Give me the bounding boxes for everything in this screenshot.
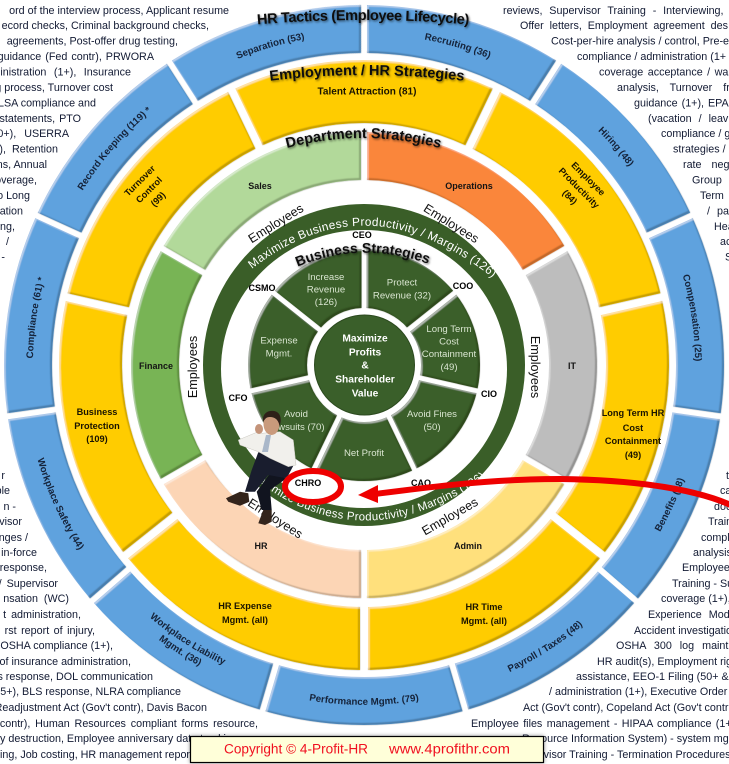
segment: employee productivity [456, 74, 683, 329]
segment: IT [526, 251, 597, 479]
segment: payroll and taxes [443, 564, 642, 721]
text block: top left tactics list: ecord checks, Criminal background checks, [2, 20, 209, 32]
label: compliance: Compliance (61) * [26, 276, 44, 358]
segment: record keeping [27, 55, 202, 243]
text block: top left tactics list: / [6, 236, 9, 248]
segment: increase revenue [270, 240, 385, 339]
segment: avoid lawsuits [243, 360, 353, 475]
trouser leg front [245, 452, 293, 492]
shoe left [226, 492, 249, 506]
center hub: maximize profits and shareholder value: & [361, 360, 369, 372]
wheel: business strategies segments [240, 240, 488, 481]
text block: top right tactics list: strategies / [673, 144, 726, 156]
segment: hiring [526, 55, 701, 243]
callout: CHRO red ellipse [285, 471, 341, 502]
text block: top left tactics list: LSA compliance and [0, 98, 96, 110]
segment: net profit [316, 417, 412, 481]
segment: compensation [647, 216, 729, 420]
label: business protection: Protection [74, 421, 120, 431]
text block: top left tactics list: inistration (1+), Insurance [0, 66, 131, 78]
ring: department strategies segments [131, 106, 597, 624]
heading: maximize productivity top band text: Maximize Business Productivity / Margins (126) [248, 218, 496, 278]
text block: top right tactics list: Group [692, 174, 722, 186]
segment: avoid fines [375, 360, 485, 475]
text block: top left tactics list: ord of the interview process, Applicant resume [9, 5, 229, 17]
label: employees top right: Employees [421, 201, 481, 246]
label: expense management: Expense [260, 336, 298, 346]
labels: department segments [139, 181, 577, 551]
label: CAO: CAO [411, 478, 431, 488]
hand [255, 424, 263, 434]
label: separation: Separation (53) [236, 32, 304, 58]
text block: top right tactics list: Term [700, 190, 724, 202]
text block: bottom right tactics list: OSHA 300 log maint [616, 640, 728, 652]
label: expense management: Mgmt. [266, 348, 292, 360]
text block: top right tactics list: rate neg [683, 159, 729, 171]
text block: bottom left tactics list: in-force [1, 547, 37, 559]
label: avoid fines: (50) [423, 422, 441, 433]
label: long term cost containment: Long Term [426, 324, 472, 335]
text block: bottom left tactics list: t administration, [3, 609, 81, 621]
label: employee productivity: (84) [560, 188, 579, 207]
labels: employees around the band [186, 201, 542, 541]
text block: top right tactics list [503, 5, 729, 264]
text block: bottom right tactics list: Act (Gov't contr), Copeland Act (Gov't contr [523, 702, 729, 714]
neck and face [264, 413, 280, 435]
label: workplace safety: Workplace Safety (44) [38, 457, 84, 550]
shoe right [258, 510, 272, 525]
text block: bottom left tactics list: r [1, 470, 5, 482]
label: long term cost containment: Containment [422, 349, 477, 360]
segment: long term cost containment [404, 292, 488, 400]
label: CFO: CFO [228, 393, 248, 403]
label: employees top left: Employees [246, 201, 306, 246]
label: long term HR cost containment: Long Term HR [602, 408, 665, 418]
label: HR: HR [254, 541, 268, 551]
text block: top right tactics list: reviews, Supervisor Training - Interviewing, [503, 5, 724, 17]
label: IT: IT [568, 361, 577, 371]
label: COO: COO [453, 281, 473, 291]
label: business protection: Business [77, 407, 117, 417]
labels: business strategy segments [260, 272, 477, 459]
text block: bottom right tactics list: Supervisor Training - Termination Procedures [515, 749, 729, 761]
segment: HR expense management [116, 507, 385, 696]
label: avoid lawsuits: Avoid [284, 409, 308, 420]
center hub: maximize profits and shareholder value: Profits [349, 348, 381, 358]
segment: separation [168, 0, 374, 105]
label: benefits: Benefits (48) [654, 478, 686, 532]
text block: bottom right tactics list: Experience Mod [648, 609, 729, 621]
segment: admin [346, 448, 579, 624]
label: avoid lawsuits: Lawsuits (70) [267, 422, 325, 433]
segment: HR [149, 448, 382, 624]
text block: top left tactics list: ation [0, 206, 23, 218]
segment: HR time management [343, 507, 612, 696]
text block: top right tactics list: compliance / administration (1+ [577, 51, 726, 63]
text block: bottom right tactics list: Employee [682, 562, 729, 574]
label: net profit: Net Profit [344, 448, 384, 459]
label: employee productivity: Employee [569, 160, 607, 198]
text block: bottom left tactics list: contr), Human Resources compliant forms resource, [0, 718, 258, 730]
ring: maximize productivity green band [203, 204, 525, 526]
label: employees right: Employees [528, 336, 542, 398]
text block: top right tactics list: Offer letters, Employment agreement des [520, 20, 728, 32]
label: HR expense management: Mgmt. (all) [222, 615, 268, 625]
text block: top right tactics list: guidance (1+), EPA [634, 98, 729, 110]
label: turnover control: (99) [149, 190, 168, 209]
text block: top left tactics list: guidance (Fed contr), PRWORA [0, 51, 155, 63]
label: CIO: CIO [481, 389, 497, 399]
label: admin: Admin [454, 541, 482, 551]
text block: bottom left tactics list: n - [3, 501, 16, 513]
segment: expense management [240, 292, 324, 400]
tie [262, 435, 271, 452]
heading: department strategies: Department Strategies [285, 128, 443, 150]
text block: bottom left tactics list: / Supervisor [0, 578, 58, 590]
label: sales: Sales [248, 181, 272, 191]
shirt [238, 432, 296, 467]
label: HR expense management: HR Expense [218, 601, 272, 611]
footer: copyright box: www.4profithr.com [388, 742, 510, 756]
text block: top left tactics list: statements, PTO [0, 113, 81, 125]
label: workplace liability line two: Mgmt. (36) [159, 634, 202, 667]
text block: top right tactics list: coverage acceptance / wa [599, 66, 728, 78]
text block: bottom left tactics list: response, [0, 562, 47, 574]
text block: top left tactics list: ), Retention [0, 144, 58, 156]
label: long term HR cost containment: Cost [623, 423, 643, 433]
trouser leg back [257, 473, 287, 510]
label: HR time management: HR Time [465, 602, 503, 612]
segment: recruiting [354, 0, 560, 105]
text block: bottom right tactics list: assistance, EEO-1 Filing (50+ & [576, 671, 729, 683]
label: protect revenue: Revenue (32) [373, 290, 431, 302]
label: employees bottom left: Employees [245, 496, 305, 541]
segment: workplace safety [0, 400, 132, 604]
label: turnover control: Turnover [122, 163, 157, 198]
text block: top left tactics list: - [1, 252, 5, 264]
heading: employment and HR strategies: Employment / HR Strategies [270, 64, 466, 84]
label: long term cost containment: Cost [439, 336, 459, 348]
heading: maximize productivity bottom band text: Maximize Business Productivity / Margins (126) [261, 472, 482, 520]
segment: business protection [38, 288, 178, 558]
center hub: maximize profits and shareholder value: Value [352, 388, 379, 400]
segment: protect revenue [343, 240, 458, 339]
center hub: maximize profits and shareholder value [314, 315, 414, 415]
label: finance: Finance [139, 361, 173, 371]
center hub: maximize profits and shareholder value: Shareholder [335, 374, 395, 386]
segment: workplace liability [86, 564, 285, 721]
label: compensation: Compensation (25) [683, 274, 702, 361]
label: operations: Operations [445, 181, 493, 191]
label: turnover control: Control [134, 175, 164, 205]
center hub: maximize profits and shareholder value: Maximize [342, 334, 388, 344]
label: business protection: (109) [86, 434, 108, 444]
arrow: red pointer to CHRO [358, 479, 729, 507]
text block: top right tactics list: analysis, Turnover fr [617, 82, 729, 94]
heading: HR tactics: HR Tactics (Employee Lifecycle) [257, 10, 471, 30]
segment: performance management [265, 665, 463, 725]
label: long term HR cost containment: Containment [605, 436, 661, 446]
segment: long term HR cost containment [550, 288, 690, 558]
label: avoid fines: Avoid Fines [407, 409, 457, 420]
callout: CHRO red ellipse: CHRO [295, 478, 321, 488]
text block: bottom right tactics list: / administration (1+), Executive Order [549, 686, 728, 698]
label: performance management: Performance Mgmt. (79) [310, 694, 418, 706]
labels: executive officers [228, 230, 497, 488]
label: HR time management: Mgmt. (all) [461, 616, 507, 626]
heading: business strategies: Business Strategies [295, 242, 432, 268]
text block: top right tactics list: / pa [707, 206, 729, 218]
text block: top right tactics list: (vacation / leav [648, 113, 729, 125]
text block: top left tactics list: agreements, Post-offer drug testing, [7, 36, 178, 48]
footer: copyright box: Copyright © 4-Profit-HR [224, 742, 368, 756]
label: long term HR cost containment: (49) [625, 450, 641, 460]
text block: top left tactics list [0, 5, 229, 264]
ring: employment strategies yellow segments [38, 60, 690, 696]
text block: bottom right tactics list: coverage (1+), [661, 593, 729, 605]
label: employee productivity: Productivity [557, 166, 602, 211]
segment: turnover control [45, 74, 272, 329]
label: record keeping: Record Keeping (119) * [77, 107, 149, 190]
text block: top right tactics list: Cost-per-hire analysis / control, Pre-e [551, 36, 729, 48]
segment: talent attraction [235, 60, 493, 145]
text block: bottom left tactics list: ing, Job costing, HR management reports, HR [0, 749, 220, 761]
text block: bottom right tactics list [471, 470, 729, 761]
text block: bottom right tactics list: Employee files management - HIPAA compliance (1+) [471, 718, 729, 730]
label: long term cost containment: (49) [440, 362, 458, 373]
label: hiring: Hiring (48) [598, 126, 634, 166]
label: talent attraction: Talent Attraction (81) [318, 86, 416, 98]
label: increase revenue: Increase [308, 272, 344, 283]
label: employees left: Employees [186, 336, 200, 398]
label: CSMO: CSMO [248, 283, 276, 293]
illustration: seated executive [226, 411, 296, 525]
segment: sales [149, 106, 382, 282]
text block: bottom right tactics list: HR audit(s), Employment rig [597, 656, 729, 668]
text block: bottom left tactics list: of insurance administration, [0, 656, 131, 668]
segment: operations [346, 106, 579, 282]
hair [263, 411, 281, 426]
label: CEO: CEO [352, 230, 372, 240]
text block: bottom right tactics list: compl [701, 532, 729, 544]
labels: employment strategies segments [74, 86, 665, 626]
label: protect revenue: Protect [387, 278, 418, 288]
footer: copyright box [190, 736, 544, 762]
segment: finance [131, 251, 202, 479]
segment: compliance [0, 216, 81, 420]
label: workplace liability line one: Workplace Liability [150, 612, 226, 666]
text block: bottom left tactics list: rst report of injury, [5, 625, 95, 637]
label: increase revenue: (126) [315, 297, 337, 308]
text block: bottom left tactics list: y destruction, Employee anniversary date tracking [0, 733, 238, 745]
label: payroll and taxes: Payroll / Taxes (48) [507, 620, 583, 672]
text block: bottom right tactics list: t [726, 470, 729, 482]
text block: top right tactics list: compliance / g [661, 128, 729, 140]
label: increase revenue: Revenue [307, 284, 345, 296]
text block: bottom left tactics list: nsation (WC) [3, 593, 69, 605]
label: employees bottom right: Employees [420, 495, 480, 538]
text block: bottom right tactics list: Resource Information System) - system mgr [522, 733, 729, 745]
text block: bottom left tactics list [0, 470, 258, 761]
text block: bottom left tactics list: Readjustment Act (Gov't contr), Davis Bacon [0, 702, 207, 714]
label: recruiting: Recruiting (36) [424, 33, 490, 60]
segment: benefits [596, 400, 729, 604]
